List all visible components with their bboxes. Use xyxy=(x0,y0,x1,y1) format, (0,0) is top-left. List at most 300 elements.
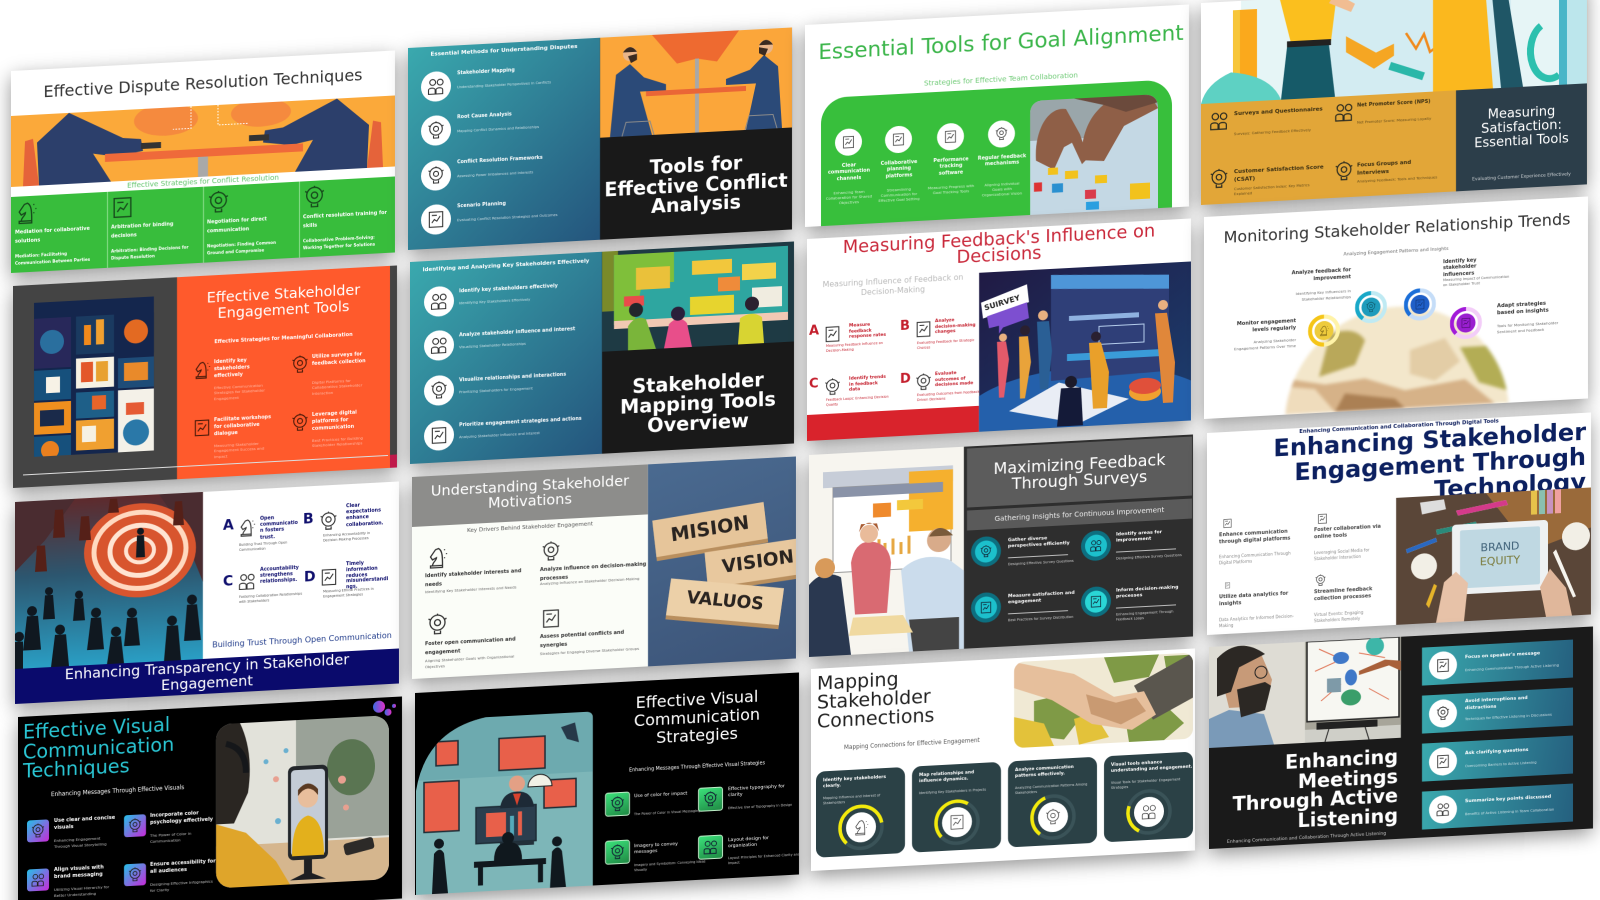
item A: response rates xyxy=(849,333,886,340)
title: Mapping Tools xyxy=(620,387,776,419)
card: interruptions: Techniques for Effective Listening in Discussions xyxy=(1465,713,1552,721)
slide: Effective Stakeholder Engagement Tools xyxy=(13,265,397,488)
item: stakeholder mapping xyxy=(421,68,551,102)
item: tracking: tracking xyxy=(940,163,962,170)
item B xyxy=(299,494,397,549)
item: layout: organization xyxy=(728,843,757,850)
item: negotiation: Negotiation for direct xyxy=(207,216,267,226)
title: Stakeholder xyxy=(817,686,931,714)
card: focus: Enhancing Communication Through Active Listening xyxy=(1465,663,1559,672)
item: communication: Objectives xyxy=(839,199,859,205)
item: conflicts: Assess potential conflicts and xyxy=(540,630,624,640)
card 4: understanding and engagement. xyxy=(1111,765,1192,774)
card 3: Stakeholders xyxy=(1015,790,1037,795)
item A: Measure xyxy=(849,323,870,329)
item: conflicts xyxy=(540,602,645,663)
title xyxy=(620,368,776,437)
item: planning: Communication for xyxy=(881,191,917,198)
heading: Identifying and Analyzing Key Stakeholders Effectively xyxy=(423,258,589,273)
image: two women analysing charts xyxy=(1201,0,1587,104)
decoration: purple dots xyxy=(372,698,402,718)
item: root cause: Root Cause Analysis xyxy=(457,112,512,120)
item: analyze: Analyze feedback for xyxy=(1292,267,1351,276)
item D: decisions made xyxy=(935,382,973,389)
item D: outcomes of xyxy=(935,376,965,383)
item C: strengthens xyxy=(260,572,293,579)
item: workshops: Measuring Stakeholder xyxy=(214,441,259,448)
card 2 xyxy=(912,762,1001,853)
item: prioritize: Analyzing Stakeholder Influence and Interest xyxy=(459,431,540,439)
item: accessibility xyxy=(124,859,216,894)
title: Essential Tools xyxy=(1474,131,1569,151)
card 1: Mapping Influence and Interest of xyxy=(823,793,880,800)
item: negotiation: Ground and Compromise xyxy=(207,248,264,256)
title: Engagement Through xyxy=(1294,443,1586,486)
panel: title header xyxy=(967,437,1192,508)
item: training: Working Together for Solutions xyxy=(303,242,375,251)
panel: green strategies xyxy=(11,176,395,273)
item: identify: Identify key xyxy=(1443,257,1477,265)
image: man at a whiteboard xyxy=(1209,637,1401,748)
title xyxy=(1273,420,1586,511)
panel: subtitle band xyxy=(967,499,1192,531)
item B: Enhancing Accountability in xyxy=(323,531,370,538)
item: inform: processes xyxy=(1116,593,1142,600)
title: Decisions xyxy=(957,242,1041,268)
card 2: Map relationships and xyxy=(919,770,974,778)
image: tablet with brand equity: BRAND xyxy=(1481,539,1519,554)
slide: Enhancing Transparency in Stakeholder Engagement xyxy=(15,481,399,704)
card 3: Analyzing Communication Patterns Among xyxy=(1015,782,1087,790)
item: open communication: Aligning Stakeholder Goals with Organizational xyxy=(425,654,514,663)
subtitle: Enhancing Communication and Collaboration Through Digital Tools xyxy=(1299,418,1499,435)
item: analyze xyxy=(424,326,576,361)
subtitle: Effective Strategies for Conflict Resolution xyxy=(127,173,279,190)
item: identify: Engagement xyxy=(214,395,239,401)
subtitle: Mapping Connections for Effective Engagement xyxy=(844,738,980,751)
item D: Measuring Ethical Practices in xyxy=(323,587,374,594)
slide: Effective Dispute Resolution Techniques xyxy=(11,50,395,273)
item: analyze: Stakeholder Relationships xyxy=(1302,294,1351,301)
block: vision: VISION xyxy=(721,546,795,578)
item C: Quality xyxy=(826,402,838,407)
item: identify areas xyxy=(1081,526,1191,571)
item A: trust. xyxy=(260,535,275,541)
item: monitor: levels regularly xyxy=(1252,325,1296,333)
item: prioritize: Prioritize engagement strategies and actions xyxy=(459,417,582,428)
item: csat xyxy=(1210,164,1324,197)
card 1: clearly. xyxy=(823,784,841,790)
block: mision: MISION xyxy=(670,512,750,546)
item A: Measuring Feedback Influence on xyxy=(826,341,883,348)
title: Listening xyxy=(1297,803,1398,832)
item: visualize xyxy=(424,372,566,406)
item B: Choices xyxy=(917,345,930,350)
card: clarifying: Overcoming Barriers to Active Listening xyxy=(1465,760,1537,768)
item A: communicatio xyxy=(260,521,298,528)
item: surveys: Interaction xyxy=(312,390,333,396)
image: watercolour meeting xyxy=(809,447,964,657)
item: visualize: Visualize relationships and interactions xyxy=(459,373,566,383)
item: layout: Layout Principles for Enhanced Clarity and xyxy=(728,852,799,860)
item: online tools: Foster collaboration via xyxy=(1314,524,1381,533)
panel: title header: Maximizing Feedback xyxy=(994,450,1165,478)
item: gather: perspectives efficiently xyxy=(1008,541,1070,549)
item: online tools: Stakeholder Interaction xyxy=(1314,554,1361,561)
item: scenario planning: Evaluating Conflict Resolution Strategies and Outcomes xyxy=(457,213,558,222)
item: colour: Incorporate color xyxy=(150,810,199,819)
item: communication: Enhancing Team xyxy=(833,189,865,195)
item C: Accountability xyxy=(260,566,299,573)
item: surveys: Surveys and Questionnaires xyxy=(1234,106,1323,117)
item: feedback: Organizational Vision xyxy=(982,190,1022,197)
item: workshops: for collaborative xyxy=(214,422,260,430)
item: communication: channels xyxy=(837,175,861,182)
title: Monitoring Stakeholder Relationship Trends xyxy=(1224,209,1570,247)
item: online tools: online tools xyxy=(1314,533,1347,540)
item: accessibility: for Clarity xyxy=(150,887,169,893)
item: colour: psychology effectively xyxy=(150,817,213,826)
card: clarifying: Ask clarifying questions xyxy=(1465,748,1529,756)
title: Stakeholder xyxy=(632,368,764,398)
item: platforms: Stakeholder Relationships xyxy=(312,441,362,448)
title xyxy=(207,282,360,322)
item: surveys: feedback collection xyxy=(312,358,366,367)
card: interruptions: distractions xyxy=(1465,704,1496,711)
item: tracking: Measuring Progress with xyxy=(928,183,974,190)
item: feedback: collection processes xyxy=(1314,593,1371,602)
item: negotiation: communication xyxy=(207,226,249,234)
item: adapt: based on insights xyxy=(1497,308,1549,317)
item D: Evaluate xyxy=(935,371,956,377)
item A xyxy=(205,507,299,560)
title: Enhancing Stakeholder xyxy=(1273,418,1586,462)
item: workshops: Impact xyxy=(214,453,227,459)
item: frameworks: Conflict Resolution Frameworks xyxy=(457,156,543,165)
card 4 xyxy=(1104,752,1193,842)
item: focus groups xyxy=(1335,160,1438,184)
image: analyst with wall of screens xyxy=(416,712,594,895)
item: identify xyxy=(195,358,266,401)
item: analyze influence xyxy=(540,535,645,592)
item A: Decision-Making xyxy=(826,347,854,353)
band title: Engagement xyxy=(161,673,253,694)
item: scenario planning xyxy=(421,201,558,235)
item C: C xyxy=(223,573,233,590)
item: clear visuals: Through Visual Storytelling xyxy=(54,841,107,849)
block: valuos xyxy=(666,578,784,625)
item: planning xyxy=(878,126,920,203)
item: root cause xyxy=(421,112,539,146)
panel: steps xyxy=(410,252,602,464)
title: Enhancing xyxy=(1285,745,1398,774)
item: identify interests: Identify stakeholder interests and xyxy=(425,568,521,579)
item: inform: Inform decision-making xyxy=(1116,585,1178,594)
title: Tools for xyxy=(650,151,742,179)
item: root cause: Mapping Conflict Dynamics and Relationships xyxy=(457,125,539,133)
item C: with Stakeholders xyxy=(239,598,269,604)
subtitle: Evaluating Customer Experience Effectively xyxy=(1472,172,1571,183)
item: brand: Utilizing Visual Hierarchy for xyxy=(54,884,109,892)
item: analyze xyxy=(1291,267,1387,324)
item: nps: Net Promoter Score: Measuring Loyalty xyxy=(1357,116,1431,125)
item: analyze influence: Analyze influence on decision-making xyxy=(540,561,646,573)
item: clear visuals xyxy=(27,815,122,851)
item: identify interests: Identifying Key Stakeholder Interests and Needs xyxy=(425,584,516,594)
title: Technology xyxy=(1434,468,1586,504)
item: feedback: Streamline feedback xyxy=(1314,586,1372,595)
subtitle: Decision-Making xyxy=(861,284,925,297)
item C: C xyxy=(809,376,819,392)
tagline: Building Trust Through Open Communication xyxy=(212,631,392,649)
item D xyxy=(900,370,981,402)
item: online tools xyxy=(1314,509,1396,561)
item: feedback: Goals with xyxy=(992,186,1012,192)
item: arbitration: Arbitration: Binding Decisions for xyxy=(111,245,188,254)
card: clarifying xyxy=(1422,736,1573,782)
item: layout xyxy=(698,831,798,866)
item: arbitration xyxy=(107,187,204,268)
item: open communication xyxy=(425,607,535,669)
item B: Evaluating Feedback for Strategic xyxy=(917,338,974,345)
item A xyxy=(809,323,886,353)
image: survey illustration xyxy=(978,262,1191,432)
title: Analysis xyxy=(651,190,741,218)
item: typography: Effective Use of Typography in Design xyxy=(728,803,792,810)
image: hands placing sticky notes xyxy=(1030,94,1158,215)
item: typography xyxy=(698,783,798,816)
item: training: Collaborative Problem-Solving: xyxy=(303,235,375,243)
item C: Identify trends xyxy=(849,375,886,382)
item: mediation: solutions xyxy=(15,237,40,245)
image: handshake over map xyxy=(1014,653,1193,748)
item B: expectations xyxy=(346,509,381,516)
subtitle: Enhancing Messages Through Effective Visual Strategies xyxy=(629,761,765,774)
image: two men at a table xyxy=(600,28,792,138)
item: focus groups: Interviews xyxy=(1357,169,1389,176)
item: surveys: Digital Platforms for xyxy=(312,378,351,385)
item: accessibility: Designing Effective Infographics xyxy=(150,879,213,887)
block: valuos: VALUOS xyxy=(685,588,765,615)
title band: Understanding Stakeholder xyxy=(431,473,629,500)
item: analytics: Utilize data analytics for xyxy=(1219,591,1288,600)
item: adapt: Tools for Monitoring Stakeholder xyxy=(1497,320,1558,328)
item B: Clear xyxy=(346,504,360,509)
item: frameworks: Assessing Power Imbalances and Interests xyxy=(457,170,533,178)
item: typography: clarity xyxy=(728,793,743,799)
item: identify areas: improvement xyxy=(1116,537,1151,544)
red band xyxy=(807,406,979,441)
item B: collaboration. xyxy=(346,521,383,528)
item: planning: planning xyxy=(887,166,911,173)
item: adapt: Sentiment and Feedback xyxy=(1497,326,1544,334)
item: clear visuals: Enhancing Engagement xyxy=(54,836,100,843)
item: open communication: engagement xyxy=(425,648,460,656)
item: identify: Identify key stakeholders effectively xyxy=(459,284,558,294)
slide: Effective Visual Communication Strategies xyxy=(415,672,799,895)
band title xyxy=(15,648,399,704)
item: online tools: Leveraging Social Media for xyxy=(1314,547,1369,555)
slide: Enhancing Stakeholder Engagement Through Technology xyxy=(1207,412,1591,635)
item: monitor: Monitor engagement xyxy=(1237,318,1296,327)
item: planning: Streamlining xyxy=(887,186,911,193)
card 1 xyxy=(816,767,905,858)
item: layout: Impact xyxy=(728,860,740,865)
item: digital platforms: Enhance communication xyxy=(1219,529,1288,538)
item: negotiation: Negotiation: Finding Common xyxy=(207,240,276,249)
item A: Open xyxy=(260,516,274,522)
item C: in feedback xyxy=(849,381,878,387)
item: training xyxy=(303,186,387,251)
item: identify: stakeholders xyxy=(214,364,250,372)
item: monitor xyxy=(1234,314,1340,351)
item D xyxy=(299,554,397,603)
item: identify: Identifying Key Stakeholders Effectively xyxy=(459,298,530,305)
item: analyze: Analyze stakeholder influence and interest xyxy=(459,327,575,338)
panel: mustard metrics xyxy=(1210,98,1438,197)
item: layout: Layout design for xyxy=(728,836,769,843)
item: workshops: dialogue xyxy=(214,430,238,437)
item: communication: communication xyxy=(828,168,870,176)
title: Effective Dispute Resolution Techniques xyxy=(43,65,363,101)
item: identify interests: needs xyxy=(425,581,442,588)
item: focus groups: Analyzing Feedback: Tools and Techniques xyxy=(1357,174,1437,184)
image: negotiation at table xyxy=(11,96,395,187)
panel: orange content xyxy=(177,266,390,479)
image: survey illustration: SUIRVEY xyxy=(983,293,1021,312)
item: mediation: Communication Between Parties xyxy=(15,257,90,266)
title: Communication xyxy=(634,705,760,730)
item B: enhance xyxy=(346,516,369,522)
item: analyze influence: Analyzing Influence on Stakeholder Decision-Making xyxy=(540,576,639,586)
title: Satisfaction: xyxy=(1481,118,1562,137)
title: Measuring xyxy=(1488,104,1555,123)
item C: Feedback Loops: Enhancing Decision xyxy=(826,395,889,402)
item A: A xyxy=(809,323,819,339)
item: brand: Align visuals with xyxy=(54,864,104,873)
item: imagery: Imagery and Symbolism: Conveying Ideas xyxy=(634,859,706,867)
card: summarize xyxy=(1422,784,1573,830)
card: summarize: Benefits of Active Listening in Team Collaboration xyxy=(1465,808,1554,816)
slide: Essential Tools for Goal Alignment xyxy=(805,4,1189,227)
slide: Maximizing Feedback Through Surveys xyxy=(809,434,1193,657)
item D: misunderstandi xyxy=(346,577,388,585)
item: feedback: Virtual Events: Engaging xyxy=(1314,610,1363,617)
card 3 xyxy=(1008,757,1097,847)
item A: Communication xyxy=(239,546,266,552)
item: measure xyxy=(971,587,1081,633)
item: inform: Enhancing Engagement Through xyxy=(1116,610,1173,617)
item C: Fostering Collaboration Relationships xyxy=(239,592,302,599)
title: Effective Stakeholder xyxy=(207,282,360,307)
item D: D xyxy=(900,371,911,387)
slide: Monitoring Stakeholder Relationship Trends xyxy=(1204,196,1588,419)
title: Meetings xyxy=(1298,764,1398,793)
item: identify: Measuring Impact of Communication xyxy=(1443,275,1509,282)
item: platforms: communication xyxy=(312,423,354,432)
item: gather xyxy=(971,531,1081,577)
item: mediation xyxy=(11,192,108,273)
title: Techniques xyxy=(23,754,130,783)
item: identify interests xyxy=(425,540,535,598)
item C: data xyxy=(849,388,860,393)
item: imagery: messages xyxy=(634,849,658,856)
card 4: Visual tools enhance xyxy=(1111,760,1162,768)
item: monitor: Analyzing Stakeholder xyxy=(1254,337,1296,344)
item: planning: Collaborative xyxy=(881,159,917,167)
subtitle: Key Drivers Behind Stakeholder Engagement xyxy=(467,521,593,534)
title xyxy=(1474,104,1569,151)
title: Effective Visual xyxy=(23,713,170,744)
item: brand xyxy=(27,864,122,900)
item: analyze: Visualizing Stakeholder Relationships xyxy=(459,342,526,349)
item: identify: Identify key xyxy=(214,358,247,365)
item: identify: influencers xyxy=(1443,270,1474,278)
image: woman filming on a phone xyxy=(216,716,389,888)
item: identify: effectively xyxy=(214,371,243,379)
item: platforms: Leverage digital xyxy=(312,410,357,418)
item: stakeholder mapping: Understanding Stakeholder Perspectives in Conflicts xyxy=(457,80,551,89)
item: measure: engagement xyxy=(1008,599,1041,605)
item: accessibility: all audiences xyxy=(150,867,187,875)
item D: Timely xyxy=(346,561,364,567)
title band: Motivations xyxy=(488,491,572,512)
item: imagery: Imagery to convey xyxy=(634,842,678,849)
item: analytics xyxy=(1219,578,1309,628)
item: training: Conflict resolution training for xyxy=(303,210,387,220)
item: analyze: Identifying Key Influencers in xyxy=(1296,288,1351,296)
item: planning: Effective Goal Setting xyxy=(878,196,920,203)
item: feedback: Stakeholders Remotely xyxy=(1314,616,1360,623)
title: Overview xyxy=(647,409,749,437)
image: crowd around a target xyxy=(15,492,203,669)
item: tracking: Goal Tracking Tools xyxy=(933,188,969,195)
item: surveys: Utilize surveys for xyxy=(312,351,362,360)
item: open communication: Foster open communication and xyxy=(425,636,516,647)
item: identify xyxy=(424,283,558,317)
slide: Measuring Feedback's Influence on Decisions xyxy=(807,218,1191,441)
item: gather: Designing Effective Survey Questions xyxy=(1008,559,1074,566)
item: platforms: platforms for xyxy=(312,417,348,425)
item: analyze influence: processes xyxy=(540,574,568,582)
item D: ngs. xyxy=(346,585,358,590)
title: Measuring Feedback's Influence on xyxy=(843,220,1155,258)
title band xyxy=(412,464,648,527)
image: tablet with brand equity xyxy=(1396,487,1591,625)
item: feedback xyxy=(978,120,1026,197)
item: csat: Customer Satisfaction Score xyxy=(1234,164,1324,175)
item: workshops: Engagement Success and xyxy=(214,446,264,454)
image: wooden blocks xyxy=(648,456,796,666)
title: Through Active xyxy=(1233,784,1398,816)
title: Essential Tools for Goal Alignment xyxy=(818,21,1184,65)
item: conflicts: synergies xyxy=(540,641,567,649)
card: focus xyxy=(1422,640,1573,686)
item C xyxy=(809,374,889,407)
item C xyxy=(205,559,299,608)
item: analytics: Making xyxy=(1219,622,1233,628)
subtitle xyxy=(823,273,963,297)
item: planning: platforms xyxy=(886,172,912,179)
title xyxy=(1233,747,1398,834)
item: open communication: Objectives xyxy=(425,663,445,669)
image: semicircle handshake and map xyxy=(1284,305,1510,414)
image: tablet with brand equity: EQUITY xyxy=(1480,553,1520,568)
card 1: Identify key stakeholders xyxy=(823,775,886,783)
item B: Analyze xyxy=(935,318,954,324)
item A: Building Trust Through Open xyxy=(239,540,287,547)
item: clear visuals: visuals xyxy=(54,824,74,831)
